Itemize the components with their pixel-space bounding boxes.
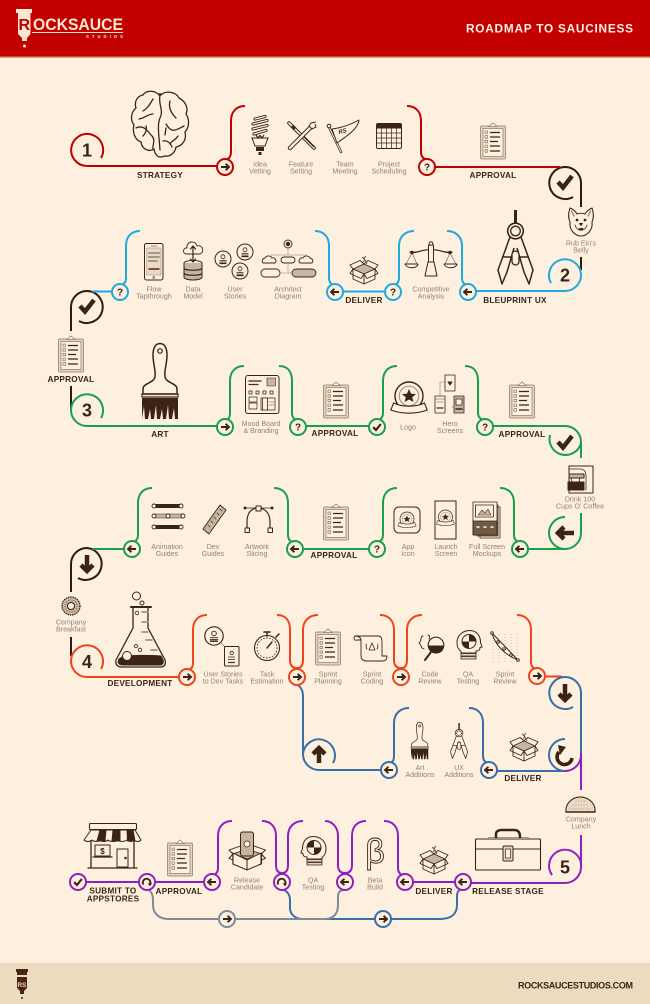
label: team meeting: Team <box>336 160 354 168</box>
node: blueprint question two <box>112 284 128 300</box>
label: submit to appstores: SUBMIT TO <box>89 886 137 896</box>
label: feature setting: Setting <box>290 168 312 176</box>
label: deliver 3: DELIVER <box>415 887 453 896</box>
label: deliver 1: DELIVER <box>345 296 383 305</box>
label: user stories: User <box>228 286 243 294</box>
node: blueprint question two: ? <box>117 288 123 298</box>
icon: team flag <box>327 120 359 152</box>
label: full screen mockups: Mockups <box>473 550 502 558</box>
icon: clipboard approval 6 <box>168 840 192 876</box>
node: submit check <box>70 874 86 890</box>
label: dev guides: Dev <box>207 543 220 551</box>
icon: team flag: RS <box>338 128 348 136</box>
node: gray arrow <box>219 911 235 927</box>
icon: box deliver 3 <box>420 846 448 874</box>
label: artwork slicing: Slicing <box>247 550 267 558</box>
label: animation guides: Guides <box>156 550 179 558</box>
track: development orange <box>71 615 562 677</box>
icon: sprint coding scroll <box>354 636 387 661</box>
icon: compass large <box>498 210 533 284</box>
icon: release candidate box <box>229 832 265 870</box>
node: beta arrow <box>337 874 353 890</box>
label: approval 1: APPROVAL <box>470 171 516 180</box>
big redo arrow <box>557 745 572 765</box>
icon: beta: β <box>365 833 385 871</box>
label: qa testing: QA <box>463 670 473 678</box>
icon: bulb <box>252 116 268 155</box>
icon: logo badge <box>391 382 427 413</box>
icon: sprint planning clipboard <box>316 629 340 665</box>
node: slicing arrow <box>512 541 528 557</box>
label: rub ein's belly: Rub Ein's <box>566 240 597 248</box>
label: ux additions: Additions <box>444 771 474 779</box>
icon: qa testing head <box>457 630 482 659</box>
label: qa testing 2: QA <box>308 876 318 884</box>
node: coding arrow <box>393 669 409 685</box>
label: hero screens: Hero <box>442 420 458 428</box>
label: sprint coding: Coding <box>361 678 383 686</box>
icon: architect diagram <box>261 240 316 277</box>
label: user stories: Stories <box>224 292 246 300</box>
icon: storefront: $ <box>100 847 105 856</box>
label: development: DEVELOPMENT <box>107 679 173 688</box>
label: task estimation: Estimation <box>250 678 284 686</box>
icon: toolbox <box>476 830 540 870</box>
icon: donut <box>62 597 80 615</box>
track: blueprint blue <box>92 231 581 292</box>
node: slicing question <box>369 541 385 557</box>
node: qa redo <box>274 874 290 890</box>
icon: mockups stack <box>473 502 500 538</box>
label: release candidate: Candidate <box>231 884 263 892</box>
label: approval 3: APPROVAL <box>312 429 358 438</box>
label: full screen mockups: Full Screen <box>469 543 505 551</box>
label: approval 5: APPROVAL <box>311 551 357 560</box>
node: animation arrow <box>124 541 140 557</box>
logo: Rocksauce Studios <box>16 9 123 48</box>
icon: box deliver 1 <box>350 256 378 284</box>
label: animation guides: Animation <box>151 543 183 551</box>
label: ux additions: UX <box>454 764 464 772</box>
label: sprint review: Sprint <box>496 670 514 678</box>
label: approval 4: APPROVAL <box>499 430 545 439</box>
label: logo: Logo <box>400 424 416 432</box>
big arrow left <box>558 527 574 539</box>
label: submit to appstores: APPSTORES <box>87 894 140 904</box>
label: approval 6: APPROVAL <box>156 887 202 896</box>
track: deliver dark blue <box>284 677 581 919</box>
label: data model: Model <box>183 292 203 300</box>
icon: data model <box>183 242 203 280</box>
label: sprint planning: Planning <box>314 678 342 686</box>
label: beta build: Build <box>367 884 383 892</box>
icon: storefront <box>84 824 141 868</box>
icon: small brush <box>411 722 428 759</box>
label: artwork slicing: Artwork <box>245 543 269 551</box>
label: project scheduling: Project <box>378 160 400 168</box>
label: drink 100 cups: Drink 100 <box>565 496 595 504</box>
label: feature setting: Feature <box>289 160 313 168</box>
label: dev guides: Guides <box>202 550 225 558</box>
icon: brain <box>132 91 189 157</box>
label: launch screen: Launch <box>434 543 458 551</box>
node: strategy question <box>419 159 435 175</box>
node: blueprint question <box>385 284 401 300</box>
node: deliver arrow purple <box>397 874 413 890</box>
label: project scheduling: Scheduling <box>371 168 407 176</box>
icon: clipboard approval 3 <box>324 382 348 418</box>
number 4: 4 <box>82 652 92 672</box>
icon: sprint review chart <box>490 632 520 662</box>
label: release candidate: Release <box>234 876 260 884</box>
label: company breakfast: Breakfast <box>56 626 86 634</box>
node: slicing question: ? <box>374 544 380 556</box>
label: app icon: Icon <box>401 550 415 558</box>
label: mood board and branding: & Branding <box>243 427 279 435</box>
label: code review: Review <box>418 678 443 686</box>
label: qa testing 2: Testing <box>302 884 324 892</box>
number 5: 5 <box>560 858 570 878</box>
track: connector black <box>71 167 581 656</box>
label: rub ein's belly: Belly <box>573 246 589 254</box>
track: strategy red <box>71 106 560 167</box>
icon: dev ruler <box>203 505 226 534</box>
footer logo <box>16 969 28 999</box>
node: deliver arrow <box>481 762 497 778</box>
node: release arrow <box>455 874 471 890</box>
node: development arrow <box>179 669 195 685</box>
number 1: 1 <box>82 140 92 160</box>
icon: qa head mirrored <box>301 836 326 865</box>
label: sprint review: Review <box>493 678 518 686</box>
title: ROADMAP TO SAUCINESS <box>466 22 633 36</box>
icon: launch screen <box>435 501 456 539</box>
big check: after art approval <box>558 436 572 448</box>
number 2: 2 <box>560 266 570 286</box>
node: art arrow <box>217 419 233 435</box>
track: gray return line <box>149 890 343 919</box>
label: idea vetting: Idea <box>253 160 267 168</box>
label: task estimation: Task <box>260 670 275 678</box>
icon: clipboard approval 2 <box>58 336 84 372</box>
track: release purple <box>86 753 581 883</box>
icon: small compass <box>450 723 468 759</box>
number 3: 3 <box>82 400 92 420</box>
label: user stories to dev tasks: User Stories <box>203 670 243 678</box>
label: art additions: Art <box>415 764 425 772</box>
node: art question <box>290 419 306 435</box>
node: candidate arrow <box>204 874 220 890</box>
label: idea vetting: Vetting <box>249 168 271 176</box>
node: blueprint arrow <box>460 284 476 300</box>
big arrow up <box>313 748 325 763</box>
icon: app icon <box>394 507 420 533</box>
node: blueprint deliver arrow <box>327 284 343 300</box>
label: flow tapthrough: Tapthrough <box>136 292 172 300</box>
big check: after blueprint approval <box>80 300 94 312</box>
label: art: ART <box>151 430 169 439</box>
icon: stopwatch <box>254 632 280 660</box>
node: art question two: ? <box>482 422 488 434</box>
node: approval arrow <box>287 541 303 557</box>
label: approval 2: APPROVAL <box>48 375 94 384</box>
label: user stories to dev tasks: to Dev Tasks <box>203 678 244 686</box>
label: architect diagram: Architect <box>274 286 302 294</box>
label: architect diagram: Diagram <box>275 292 301 300</box>
footer url: ROCKSAUCESTUDIOS.COM <box>518 980 633 990</box>
header banner <box>0 0 650 58</box>
icon: flow phone <box>144 244 163 280</box>
label: company lunch: Lunch <box>571 822 591 830</box>
footer logo: RS <box>17 982 27 989</box>
label: data model: Data <box>186 286 201 294</box>
label: qa testing: Testing <box>457 678 479 686</box>
node: art question two <box>477 419 493 435</box>
label: release stage: RELEASE STAGE <box>472 887 544 896</box>
big arrow down: green to development <box>81 555 93 571</box>
label: sprint planning: Sprint <box>319 670 337 678</box>
icon: clipboard approval 4 <box>510 382 534 418</box>
node: strategy arrow <box>217 159 233 175</box>
label: mood board and branding: Mood Board <box>242 420 280 428</box>
label: team meeting: Meeting <box>332 168 358 176</box>
node: approval redo <box>139 874 155 890</box>
node: art check <box>369 419 385 435</box>
label: company lunch: Company <box>566 816 597 824</box>
icon: scales <box>405 242 457 276</box>
icon: user stories <box>215 244 253 279</box>
label: strategy: STRATEGY <box>137 171 183 180</box>
icon: clipboard approval 5 <box>324 504 348 540</box>
icon: flask <box>116 592 165 667</box>
label: art additions: Additions <box>405 771 435 779</box>
label: app icon: App <box>402 543 414 551</box>
icon: taco <box>566 797 595 812</box>
track: art green <box>71 366 581 549</box>
logo: Rocksauce Studios: STUDIOS <box>86 34 123 39</box>
logo: Rocksauce Studios: OCKSAUCE <box>33 15 123 34</box>
label: competitive analysis: Competitive <box>412 286 450 294</box>
node: art question: ? <box>295 422 301 434</box>
label: blueprint ux: BLEUPRINT UX <box>483 296 547 305</box>
icon: coffee machine <box>568 466 593 493</box>
icon: tools <box>289 122 316 148</box>
icon: artwork bezier <box>244 506 273 532</box>
icon: paint brush <box>142 344 178 419</box>
label: beta build: Beta <box>368 876 382 884</box>
label: competitive analysis: Analysis <box>418 292 445 300</box>
node: additions arrow <box>381 762 397 778</box>
icon: box deliver 2 <box>510 733 538 761</box>
icon: animation guides <box>152 504 185 529</box>
icon: user stories to dev tasks <box>205 627 239 666</box>
node: sprint junction <box>289 669 305 685</box>
label: launch screen: Screen <box>435 550 457 558</box>
icon: calendar <box>376 124 402 148</box>
footer band <box>0 963 650 1004</box>
label: deliver 2: DELIVER <box>504 774 542 783</box>
icon: clipboard approval 1 <box>480 123 506 159</box>
logo: Rocksauce Studios: R <box>19 17 31 34</box>
icon: code review magnifier <box>419 635 444 660</box>
big check: after strategy approval <box>558 176 572 188</box>
node: blue return arrow <box>375 911 391 927</box>
big arrow down: to deliver <box>559 684 571 700</box>
node: review arrow <box>529 668 545 684</box>
node: strategy question: ? <box>424 162 430 174</box>
icon: corgi <box>568 208 594 236</box>
label: flow tapthrough: Flow <box>147 286 162 294</box>
label: code review: Code <box>422 670 439 678</box>
label: hero screens: Screens <box>437 427 463 435</box>
label: company breakfast: Company <box>56 618 87 626</box>
icon: mood board <box>246 376 279 414</box>
node: blueprint question: ? <box>390 288 396 298</box>
label: drink 100 cups: Cups O' Coffee <box>556 502 604 510</box>
icon: hero screens <box>435 375 464 413</box>
label: sprint coding: Sprint <box>363 670 381 678</box>
